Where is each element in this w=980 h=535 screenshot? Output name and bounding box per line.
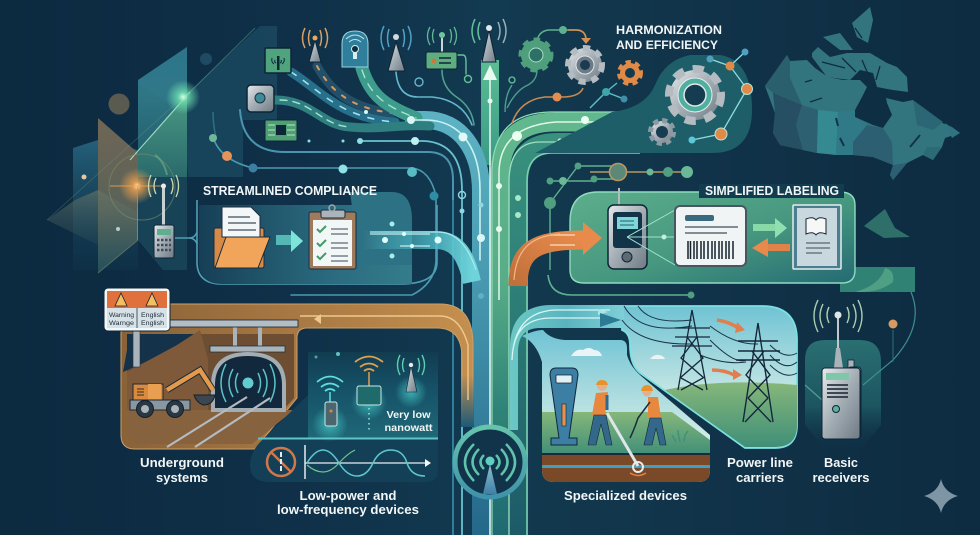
arrow: folder to checklist [276,230,303,252]
chart: low frequency wave [305,445,431,479]
icon: walkie talkie [148,175,197,258]
central stream column and green band [481,60,650,535]
text: very low nanowatt: Very low [386,410,431,421]
icon: sparkle star [924,479,958,513]
heading: underground systems: systems [156,470,208,485]
panel: power line carriers [510,305,797,448]
icon: locator device [550,368,578,445]
icon: warning sign: Warning [109,313,134,319]
central stream lines and arrow [452,65,658,535]
icon: worker with cable [630,385,688,445]
heading: simplified labeling: SIMPLIFIED LABELING [705,184,839,198]
panel: specialized devices [522,330,710,482]
decorative abstract shapes [47,26,277,273]
icon: dome sensor [342,31,368,67]
heading: harmonization and efficiency: AND EFFICIENCY [616,40,718,52]
icon: orange wifi box [355,356,383,433]
main blue band [405,120,481,535]
heading: harmonization and efficiency: HARMONIZATION [616,25,722,37]
panel: basic receivers [805,292,915,450]
heading: power line carriers: carriers [736,470,784,485]
heading: specialized devices: Specialized devices [564,488,687,503]
heading: power line carriers: Power line [727,455,793,470]
icon: router [426,27,457,69]
panel: streamlined compliance [148,175,476,284]
text: very low nanowatt [384,410,433,434]
text: very low nanowatt: nanowatt [384,423,433,434]
icon: tunnel with signal [167,346,285,447]
heading: basic receivers: receivers [812,470,870,485]
panel: simplified labeling [514,162,915,298]
heading: basic receivers [812,455,870,485]
heading: power line carriers [727,455,793,485]
icon: microchip [265,120,297,141]
icon: square module [247,85,274,112]
panel: low power devices [250,352,438,482]
icon: manual book [793,205,841,269]
harmonization connectors and gears [505,26,752,144]
arrows: label to manual [752,218,790,257]
icon: orange antenna [302,28,328,62]
central medallion [455,427,525,497]
heading: harmonization and efficiency [616,25,722,52]
copper stream and underground panel [104,288,474,449]
icon: prohibited sign [267,448,295,476]
icon: circuit board [265,48,291,73]
icon: central top antenna [472,19,506,62]
heading: underground systems [140,455,224,485]
icon: worker with rod [588,380,646,476]
icon: excavator [130,370,215,418]
icon: pylon 2 [736,323,780,422]
heading: low-power and low-frequency devices: Low-power and [300,488,397,503]
heading: low-power and low-frequency devices [277,488,419,517]
icon: warning sign [104,288,170,331]
arrow: orange input [514,222,602,286]
icon: wifi sensor [317,376,343,426]
map of Canada [765,7,960,180]
icon: barcode label [675,206,746,266]
icon: warning sign: English [141,321,164,327]
icon: radio receiver [814,300,862,439]
arrows: power direction [712,320,745,380]
stream leaving checklist [362,222,476,282]
icon: clipboard checklist [309,205,356,269]
harmonization panel [535,55,752,153]
icon: pylon 1 [672,310,712,390]
heading: basic receivers: Basic [824,455,858,470]
heading: low-power and low-frequency devices: low-frequency devices [277,502,419,517]
heading: underground systems: Underground [140,455,224,470]
left circuit streams [209,55,485,535]
icon: green antenna [398,355,424,392]
icon: warning sign: English [141,313,164,319]
icon: handheld device [608,188,675,269]
icon: warning sign: Warnge [109,321,135,327]
icon: folder with document [214,207,270,268]
icon: blue antenna [381,26,411,71]
heading: streamlined compliance: STREAMLINED COMPLIANCE [203,184,377,198]
